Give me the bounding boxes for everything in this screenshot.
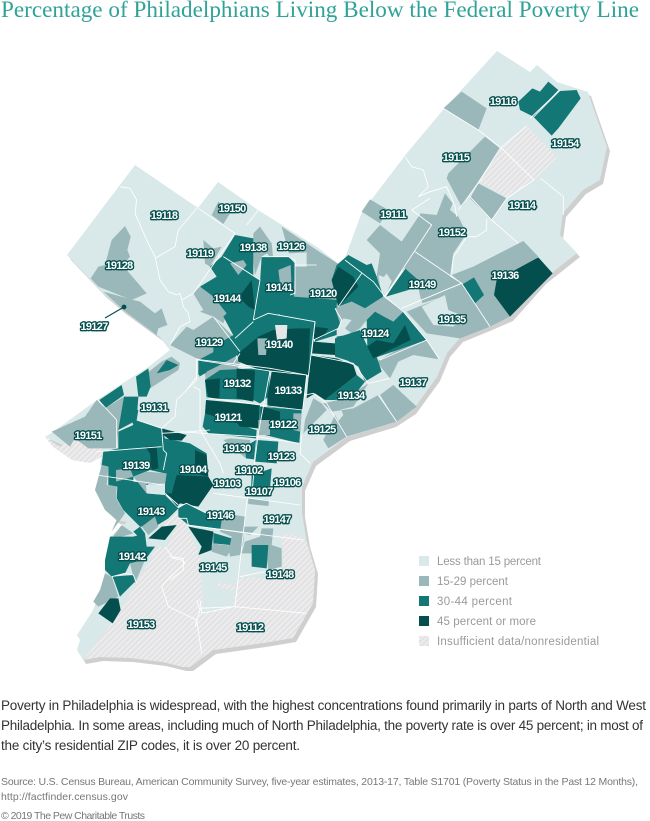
ZIP code labels: 19142 [118,551,146,563]
ZIP code labels: 19107 [245,486,273,498]
ZIP code labels: 19128 [105,260,133,272]
ZIP code labels: 19134 [337,390,366,402]
ZIP code labels: 19148 [266,569,294,581]
ZIP code labels: 19119 [187,248,214,260]
legend: Insufficient data/nonresidential [437,636,599,648]
west Philadelphia tracts [95,410,233,540]
insufficient data areas [45,126,557,667]
leader line for ZIP 19127 [105,305,126,318]
legend: 45 percent or more [437,616,536,628]
ZIP code labels: 19135 [438,314,466,326]
ZIP code labels: 19126 [277,241,305,253]
map river-edge shadow [48,55,610,671]
ZIP code labels: 19146 [206,510,234,522]
ZIP code labels: 19121 [214,412,242,424]
ZIP code labels: 19139 [122,460,150,472]
ZIP code labels: 19147 [263,514,291,526]
ZIP code labels: 19111 [380,209,407,221]
river wards and North Philadelphia tracts [198,300,439,505]
legend: 15-29 percent [437,576,509,588]
ZIP code labels: 19137 [399,377,427,389]
legend [419,556,599,648]
ZIP code labels: 19120 [309,288,337,300]
description text: Philadelphia. In some areas, including much of North Philadelphia, the poverty rate is over 45 percent; in most of [1,718,643,733]
choropleth map of Philadelphia ZIP codes [45,51,610,671]
ZIP code labels: 19112 [237,622,264,634]
ZIP code labels: 19103 [213,478,241,490]
ZIP code labels: 19106 [273,477,301,489]
source note: Source: U.S. Census Bureau, American Community Survey, five-year estimates, 2013-17, Table S1701 (Poverty Status in the Past 12 Months), [1,776,638,788]
ZIP code labels: 19122 [269,419,297,431]
ZIP code labels: 19118 [151,210,178,222]
ZIP code labels: 19129 [195,337,223,349]
ZIP code labels: 19143 [137,506,165,518]
ZIP code labels: 19104 [179,464,208,476]
ZIP code labels: 19153 [127,619,155,631]
description text: Poverty in Philadelphia is widespread, with the highest concentrations found primarily in parts of North and West [1,698,646,713]
ZIP code labels: 19144 [213,293,242,305]
source note [1,776,638,821]
ZIP code labels: 19154 [551,138,580,150]
ZIP code labels: 19127 [80,321,108,333]
map base: less than 15 percent [45,51,607,667]
ZIP code labels: 19149 [408,279,436,291]
ZIP code labels: 19145 [199,562,227,574]
ZIP code labels: 19130 [223,443,251,455]
ZIP code labels: 19133 [274,385,302,397]
legend: 30-44 percent [437,596,513,608]
ZIP code boundary lines [97,90,563,653]
ZIP code labels: 19136 [491,270,519,282]
ZIP code labels: 19140 [265,339,293,351]
ZIP code labels: 19124 [361,328,390,340]
ZIP code labels: 19102 [235,465,263,477]
description text: the city’s residential ZIP codes, it is over 20 percent. [1,738,300,753]
ZIP code labels [74,96,580,634]
northeast Philadelphia tracts [362,82,581,338]
description text [1,698,646,753]
ZIP code labels: 19150 [218,203,246,215]
ZIP code labels: 19138 [239,242,267,254]
ZIP code labels: 19114 [509,200,537,212]
ZIP code labels: 19125 [308,424,336,436]
south Philadelphia tracts [212,500,282,570]
southwest Philadelphia tracts [52,357,233,623]
northwest Philadelphia tracts [91,202,340,380]
ZIP code labels: 19116 [490,96,517,108]
ZIP code labels: 19132 [223,378,251,390]
ZIP code labels: 19115 [443,152,470,164]
ZIP code labels: 19141 [265,282,293,294]
legend: Less than 15 percent [437,556,542,568]
ZIP code labels: 19151 [74,430,102,442]
ZIP code labels: 19131 [140,402,168,414]
ZIP code labels: 19123 [267,451,295,463]
Kensington, Frankford and 19120 to 19124 tracts [280,255,427,370]
ZIP code labels: 19152 [438,227,466,239]
source note: http://factfinder.census.gov [1,791,129,803]
